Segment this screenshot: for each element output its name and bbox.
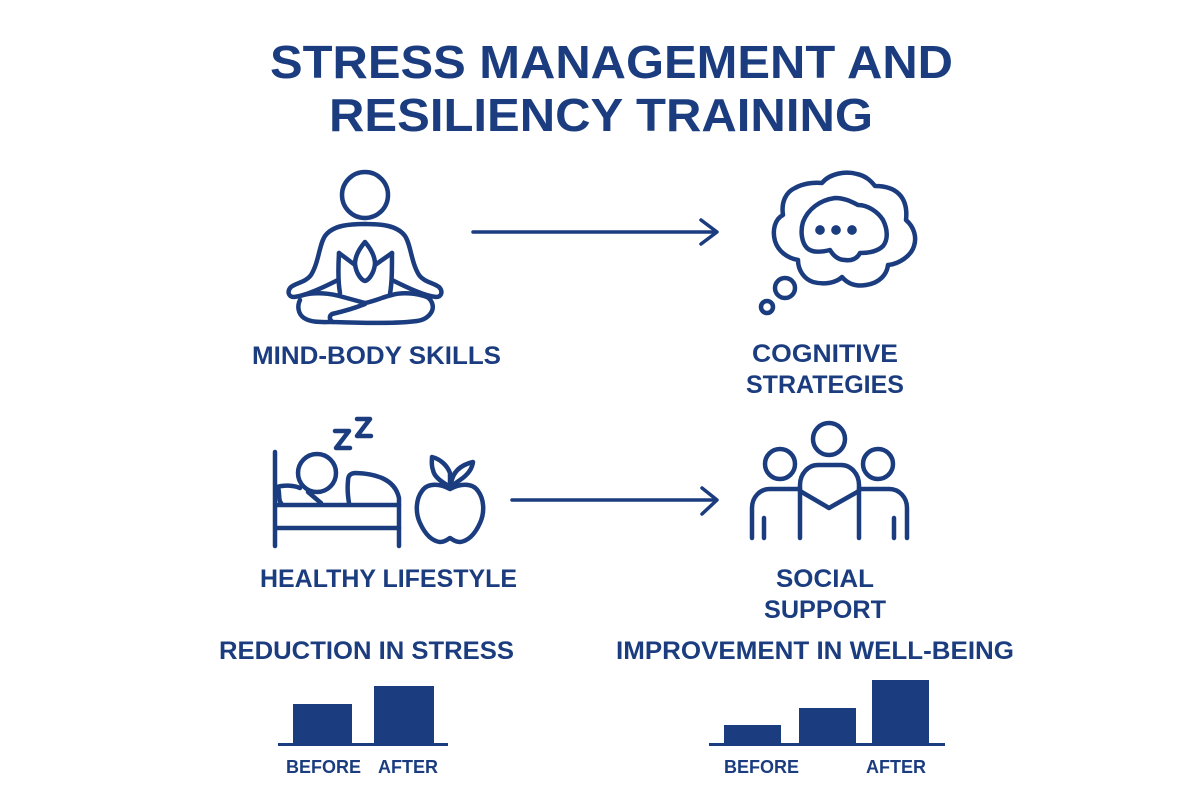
heading: reduction in stress: REDUCTION IN STRESS [219,637,514,665]
bar chart: reduction in stress [278,686,448,777]
icon: apple [417,457,483,542]
arrow: mind-body to cognitive [473,220,717,244]
bar chart: reduction in stress: BEFORE [286,757,361,777]
icon: sleeping person in bed [275,419,399,546]
bar chart: improvement in well-being: AFTER [866,757,926,777]
label: cognitive strategies: STRATEGIES [746,371,904,399]
heading: improvement in well-being: IMPROVEMENT IN WELL-BEING [616,637,1014,665]
icon: group of three people [752,423,907,538]
bar chart: improvement in well-being [709,680,945,777]
label: cognitive strategies [746,340,904,399]
arrow: lifestyle to social support [512,488,717,514]
title: RESILIENCY TRAINING [329,89,873,141]
icon: thought cloud [761,173,915,313]
bar chart: reduction in stress: AFTER [378,757,438,777]
label: mind-body skills: MIND-BODY SKILLS [252,342,501,370]
icon: meditating person [289,172,441,323]
label: social support [764,565,886,624]
label: healthy lifestyle: HEALTHY LIFESTYLE [260,565,517,593]
label: social support: SOCIAL [776,565,874,593]
bar chart: improvement in well-being: BEFORE [724,757,799,777]
label: cognitive strategies: COGNITIVE [752,340,898,368]
title: STRESS MANAGEMENT AND [270,36,953,88]
title [270,36,953,141]
label: social support: SUPPORT [764,596,886,624]
